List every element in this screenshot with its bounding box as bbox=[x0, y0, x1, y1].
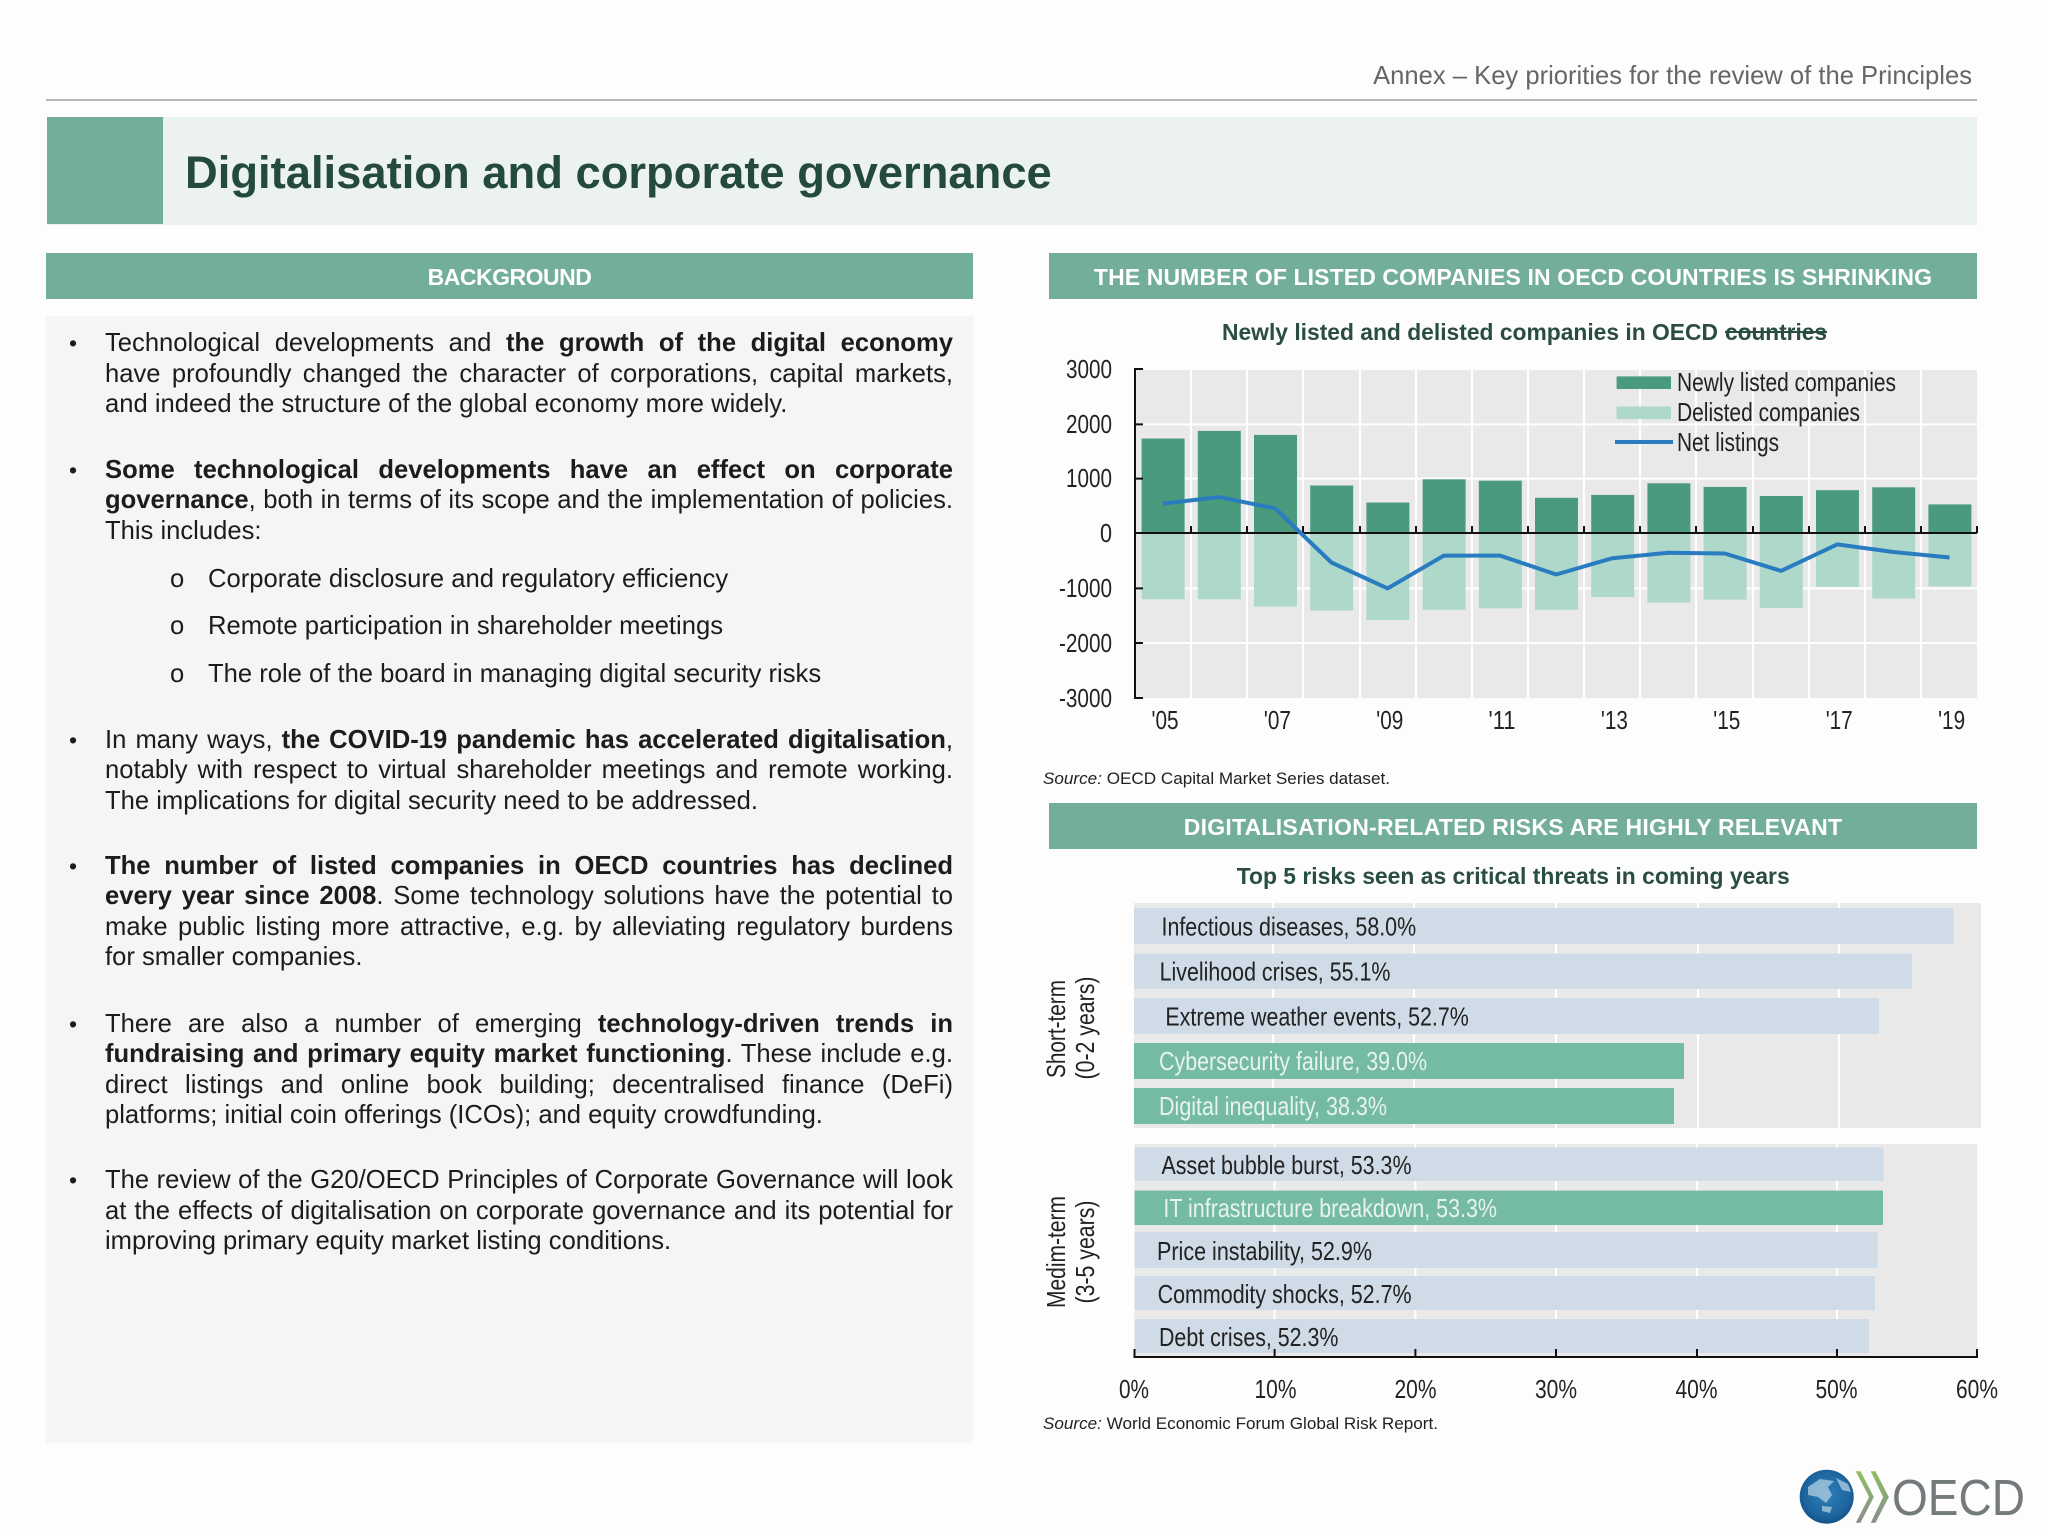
y axis labels: -2000 bbox=[1059, 628, 1112, 658]
heading: digitalisation-related risks bbox=[1049, 803, 1977, 849]
x axis labels bbox=[1119, 1374, 1998, 1404]
bars: medium-term risks: Asset bubble burst, 53.3% bbox=[1162, 1150, 1412, 1180]
paragraph: listed companies decline: make public listing more attractive, e.g. by alleviating regulatory burdens bbox=[105, 913, 953, 941]
y axis labels: 3000 bbox=[1066, 354, 1112, 384]
x axis labels: 40% bbox=[1676, 1374, 1718, 1404]
text: • bbox=[69, 456, 77, 482]
legend: Newly listed companies bbox=[1677, 367, 1896, 397]
bars: medium-term risks: Price instability, 52.9% bbox=[1157, 1236, 1372, 1266]
x axis labels: '19 bbox=[1938, 705, 1965, 735]
axis group label: short-term: Short-term bbox=[1041, 980, 1071, 1078]
title: Digitalisation and corporate governance bbox=[185, 146, 1052, 198]
y axis labels bbox=[1059, 354, 1112, 713]
chart heading: Top 5 risks seen as critical threats in coming years bbox=[1237, 863, 1790, 889]
paragraph: growth of digital economy: have profoundly changed the character of corporations, capital markets, bbox=[105, 360, 953, 388]
sub-bullet: remote participation: Remote participation in shareholder meetings bbox=[208, 612, 723, 640]
chart: newly listed and delisted companies bbox=[1043, 319, 1978, 788]
title accent square bbox=[47, 117, 163, 224]
heading: listed companies shrinking bbox=[1049, 253, 1977, 299]
axis group label: medium-term bbox=[1041, 1196, 1100, 1308]
paragraph: COVID-19 bbox=[69, 726, 953, 815]
paragraph: technological developments bbox=[69, 456, 953, 545]
bars: short-term risks: Cybersecurity failure, 39.0% bbox=[1159, 1046, 1427, 1076]
text: • bbox=[69, 1167, 77, 1193]
bars: newly listed companies bbox=[1142, 431, 1971, 533]
y axis labels: -1000 bbox=[1059, 573, 1112, 603]
axis group label: short-term bbox=[1041, 976, 1100, 1080]
bars: short-term risks: Digital inequality, 38.3% bbox=[1159, 1091, 1387, 1121]
bars: short-term risks bbox=[1134, 908, 1954, 1124]
text: • bbox=[69, 330, 77, 356]
paragraph: review of the Principles: The review of the G20/OECD Principles of Corporate Governance will look bbox=[105, 1166, 953, 1194]
x axis labels: 0% bbox=[1119, 1374, 1149, 1404]
x axis labels: 60% bbox=[1956, 1374, 1998, 1404]
chart heading: Newly listed and delisted companies in OECD bbox=[1222, 319, 1718, 345]
axis group label: medium-term: (3-5 years) bbox=[1070, 1200, 1100, 1304]
paragraph: COVID-19: The implications for digital security need to be addressed. bbox=[105, 787, 758, 815]
x axis labels: 50% bbox=[1816, 1374, 1858, 1404]
paragraph: technology-driven trends: platforms; initial coin offerings (ICOs); and equity crowdfunding. bbox=[105, 1101, 823, 1129]
sub-bullet: digital security: The role of the board in managing digital security risks bbox=[208, 660, 821, 688]
x axis labels: 20% bbox=[1394, 1374, 1436, 1404]
sub-bullet: disclosure: Corporate disclosure and regulatory efficiency bbox=[208, 565, 728, 593]
x axis labels: '13 bbox=[1601, 705, 1628, 735]
x axis labels: '17 bbox=[1826, 705, 1853, 735]
bars: medium-term risks: Commodity shocks, 52.7% bbox=[1158, 1279, 1412, 1309]
paragraph: listed companies decline: for smaller companies. bbox=[105, 943, 362, 971]
legend bbox=[1615, 367, 1896, 457]
paragraph: technology-driven trends: direct listings and online book building; decentralised finance (DeFi) bbox=[105, 1071, 953, 1099]
axis group label: medium-term: Medim-term bbox=[1041, 1196, 1071, 1308]
title banner bbox=[47, 117, 1977, 225]
x axis labels: '07 bbox=[1264, 705, 1291, 735]
heading: digitalisation-related risks: DIGITALISATION-RELATED RISKS ARE HIGHLY RELEVANT bbox=[1184, 814, 1842, 840]
x axis labels: 10% bbox=[1254, 1374, 1296, 1404]
axis bbox=[1134, 1349, 1977, 1357]
source note: Source: World Economic Forum Global Risk Report. bbox=[1043, 1414, 1438, 1433]
icon: OECD logo: OECD bbox=[1892, 1469, 2025, 1526]
source note: Source: OECD Capital Market Series dataset. bbox=[1043, 769, 1390, 788]
x axis labels: '09 bbox=[1376, 705, 1403, 735]
axes bbox=[1135, 369, 1977, 698]
paragraph: technology-driven trends: fundraising and primary equity market functioning. These include e.g. bbox=[105, 1040, 953, 1068]
x axis labels: '05 bbox=[1152, 705, 1178, 735]
y axis labels: 2000 bbox=[1066, 409, 1112, 439]
paragraph: COVID-19: notably with respect to virtual shareholder meetings and remote working. bbox=[105, 756, 953, 784]
x axis labels bbox=[1152, 705, 1965, 735]
sub-bullet: disclosure: o bbox=[170, 565, 184, 593]
line: net listings bbox=[1163, 497, 1950, 588]
text: • bbox=[69, 852, 77, 878]
heading: background: BACKGROUND bbox=[428, 264, 591, 290]
paragraph: review of the Principles: improving primary equity market listing conditions. bbox=[105, 1227, 671, 1255]
bars: short-term risks: Extreme weather events, 52.7% bbox=[1165, 1002, 1469, 1032]
text: • bbox=[69, 726, 77, 752]
chart heading: countries bbox=[1725, 319, 1827, 345]
paragraph: listed companies decline: The number of listed companies in OECD countries has declined bbox=[105, 852, 953, 880]
paragraph: technological developments: governance, both in terms of its scope and the implementation of policies. bbox=[105, 486, 953, 514]
paragraph: growth of digital economy: and indeed the structure of the global economy more widely. bbox=[105, 390, 787, 418]
x axis labels: '11 bbox=[1488, 705, 1516, 735]
panel: background bbox=[46, 316, 973, 1443]
x axis labels: 30% bbox=[1535, 1374, 1577, 1404]
axis group label: short-term: (0-2 years) bbox=[1070, 976, 1100, 1080]
paragraph: growth of digital economy: Technological developments and the growth of the digital economy bbox=[105, 329, 953, 357]
legend: Delisted companies bbox=[1677, 397, 1860, 427]
paragraph: technological developments: This includes: bbox=[105, 517, 261, 545]
paragraph: COVID-19: In many ways, the COVID-19 pandemic has accelerated digitalisation, bbox=[105, 726, 953, 754]
y axis labels: 0 bbox=[1100, 518, 1112, 548]
text: • bbox=[69, 1010, 77, 1036]
heading: listed companies shrinking: THE NUMBER OF LISTED COMPANIES IN OECD COUNTRIES IS SHRINKING bbox=[1094, 264, 1932, 290]
sub-bullet: digital security: o bbox=[170, 660, 184, 688]
y axis labels: 1000 bbox=[1066, 463, 1112, 493]
bars: medium-term risks bbox=[1134, 1147, 1884, 1353]
header text: Annex – Key priorities for the review of the Principles bbox=[1373, 62, 1972, 90]
paragraph: review of the Principles: at the effects of digitalisation on corporate governance and its potential for bbox=[105, 1197, 953, 1225]
heading: background bbox=[46, 253, 973, 299]
bars: medium-term risks: Debt crises, 52.3% bbox=[1159, 1322, 1338, 1352]
bars: short-term risks: Infectious diseases, 58.0% bbox=[1162, 912, 1416, 942]
bars: short-term risks: Livelihood crises, 55.1% bbox=[1160, 956, 1390, 986]
paragraph: technology-driven trends: There are also a number of emerging technology-driven trends in bbox=[105, 1010, 953, 1038]
paragraph: growth of digital economy bbox=[69, 329, 953, 418]
paragraph: technological developments: Some technological developments have an effect on corporate bbox=[105, 456, 953, 484]
sub-bullet: remote participation: o bbox=[170, 612, 184, 640]
legend: Net listings bbox=[1677, 427, 1779, 457]
y axis labels: -3000 bbox=[1059, 683, 1112, 713]
bars: delisted companies bbox=[1142, 533, 1971, 620]
paragraph: listed companies decline: every year since 2008. Some technology solutions have the potential to bbox=[105, 882, 953, 910]
paragraph: listed companies decline bbox=[69, 852, 953, 971]
icon: OECD logo bbox=[1800, 1469, 2025, 1526]
x axis labels: '15 bbox=[1713, 705, 1740, 735]
paragraph: technology-driven trends bbox=[69, 1010, 953, 1129]
chart: top 5 risks bbox=[1041, 863, 1998, 1433]
paragraph: review of the Principles bbox=[69, 1166, 953, 1255]
bars: medium-term risks: IT infrastructure breakdown, 53.3% bbox=[1163, 1193, 1497, 1223]
